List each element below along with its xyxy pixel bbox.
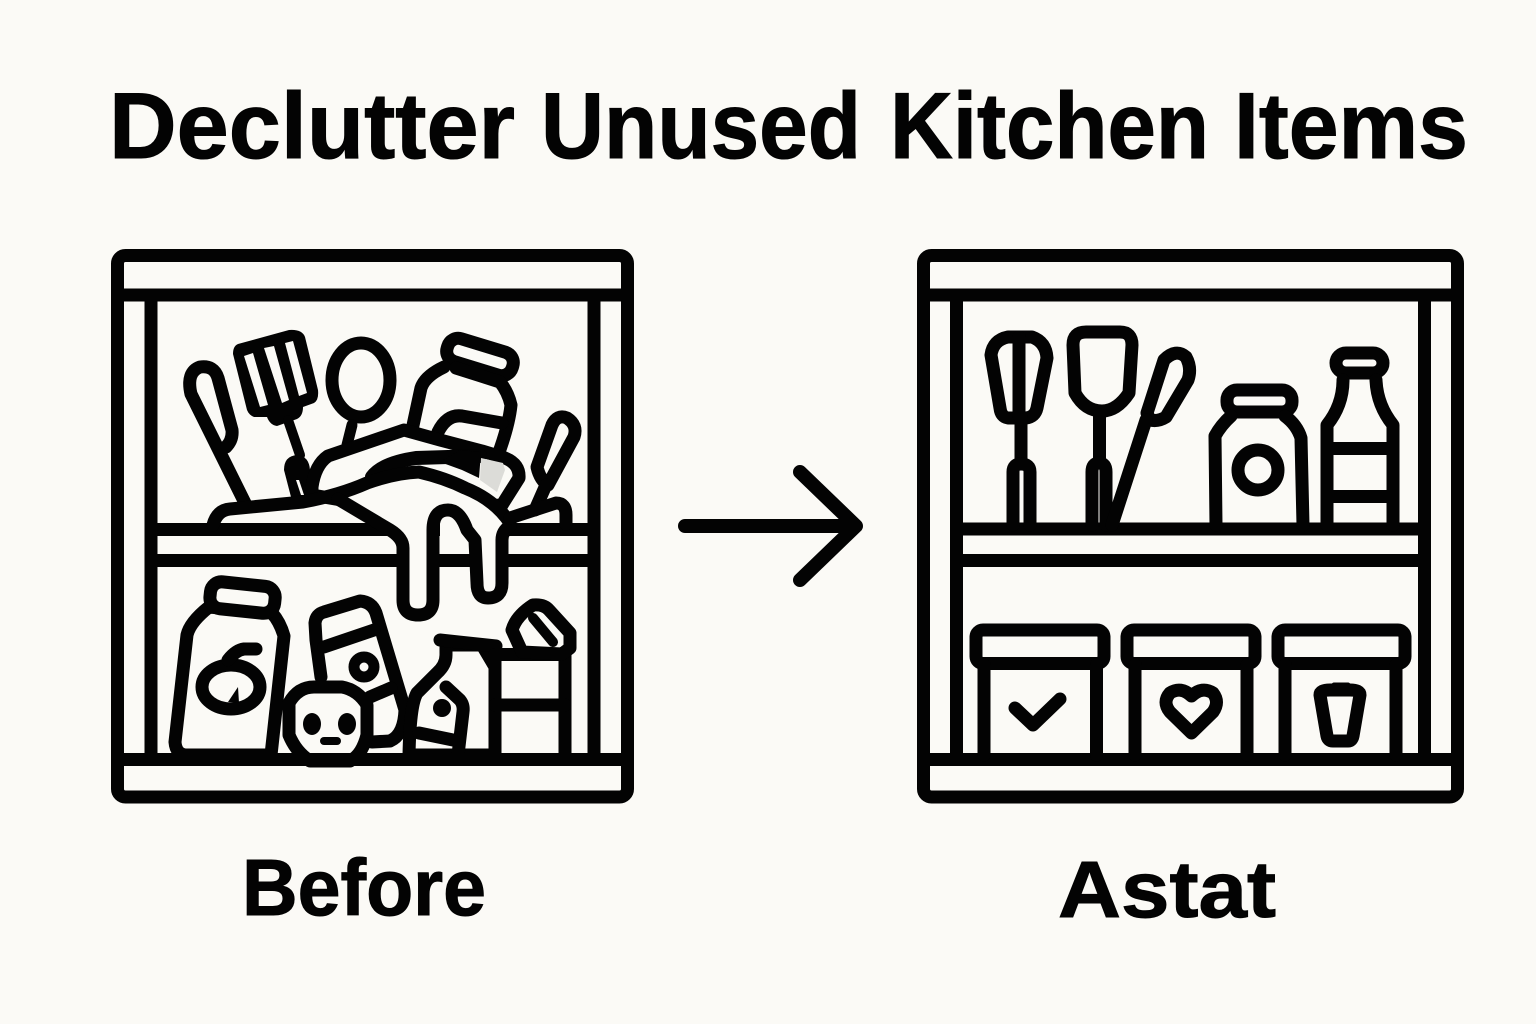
- icon: small right utensil: [535, 417, 575, 510]
- title: Declutter: [109, 73, 515, 178]
- icon: jar with apple: [175, 581, 284, 755]
- icon: bottle with tag: [409, 640, 496, 755]
- icon: round spoon: [332, 343, 390, 445]
- icon: long spoon: [1112, 353, 1190, 525]
- box with check: [976, 630, 1104, 755]
- title: [109, 73, 1468, 178]
- panel: before cluttered shelf: [118, 256, 628, 797]
- title: Unused: [541, 73, 861, 178]
- icon: bottle: [1327, 353, 1393, 525]
- arrow: [685, 472, 856, 580]
- label: after: Astat: [1058, 845, 1276, 934]
- icon: open can: [495, 605, 570, 755]
- icon: tilted shaker: [315, 601, 405, 742]
- box with cup: [1278, 630, 1405, 755]
- bottom shelf rail: before: [118, 753, 628, 766]
- icon: turner: [1073, 332, 1132, 525]
- title: Items: [1234, 73, 1468, 178]
- icon: tilted jar: [412, 336, 516, 455]
- title: Kitchen: [890, 73, 1209, 178]
- icon: left spatula: [190, 367, 246, 505]
- icon: round-label jar: [1215, 390, 1303, 525]
- shelf frame: before: [118, 256, 628, 797]
- box with heart: [1127, 630, 1255, 755]
- icon: whisk: [991, 337, 1047, 525]
- panel: after organised shelf: [924, 256, 1458, 797]
- icon: cloth pile: [213, 430, 566, 615]
- icon: skull-like face jar: [289, 687, 367, 761]
- icon: slotted turner: [233, 330, 318, 497]
- shelf frame: after: [924, 256, 1458, 797]
- label: before: Before: [242, 843, 486, 932]
